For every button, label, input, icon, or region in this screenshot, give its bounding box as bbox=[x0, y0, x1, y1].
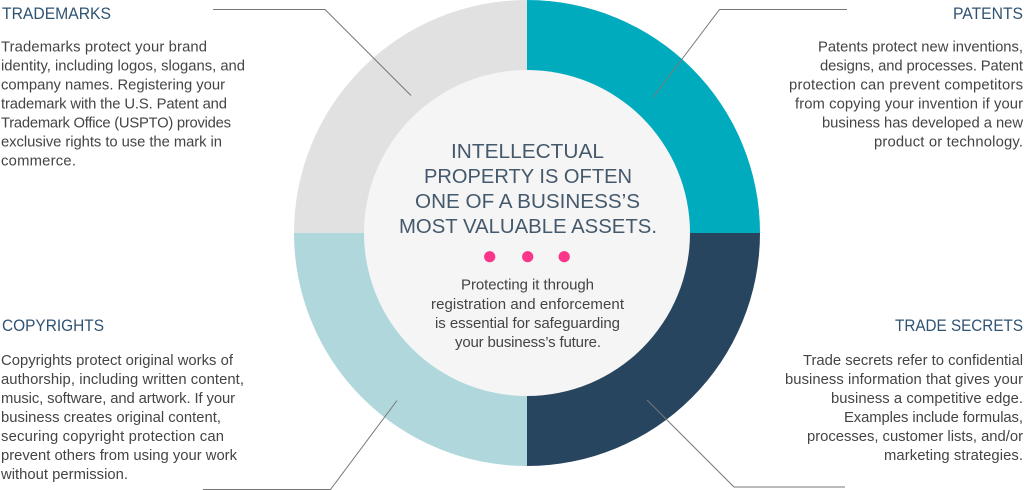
text: patents: business has developed a new bbox=[822, 116, 1023, 132]
center text: is essential for safeguarding bbox=[435, 315, 620, 332]
text: trademarks: trademark with the U.S. Patent and bbox=[1, 96, 227, 112]
text: trademarks bbox=[1, 40, 245, 170]
text: copyrights: prevent others from using your work bbox=[1, 448, 238, 464]
pink dots bbox=[484, 251, 570, 262]
text: trademarks: Trademarks protect your brand bbox=[1, 40, 207, 56]
leader line: copyrights bbox=[203, 400, 397, 490]
donut chart bbox=[294, 0, 760, 466]
segment: patents bbox=[527, 0, 760, 233]
leader line: trademarks bbox=[213, 10, 411, 96]
center heading: ONE OF A BUSINESS’S bbox=[415, 190, 640, 213]
text: copyrights: without permission. bbox=[0, 467, 128, 483]
text: trademarks: exclusive rights to use the mark in bbox=[1, 134, 222, 150]
center circle bbox=[364, 70, 690, 396]
text: trade secrets: marketing strategies. bbox=[884, 448, 1023, 464]
text: trade secrets: business information that gives your bbox=[785, 372, 1023, 388]
center text: Protecting it through bbox=[461, 276, 594, 294]
center text bbox=[431, 276, 625, 351]
center text: registration and enforcement bbox=[431, 296, 625, 313]
leader line: patents bbox=[653, 10, 847, 98]
text: trade secrets: Examples include formulas, bbox=[844, 410, 1023, 426]
segment: trade secrets bbox=[527, 233, 760, 466]
center text: your business’s future. bbox=[455, 334, 601, 351]
text: trade secrets: Trade secrets refer to confidential bbox=[803, 353, 1023, 369]
text: patents: product or technology. bbox=[874, 134, 1023, 150]
text: copyrights: authorship, including written content, bbox=[1, 372, 244, 388]
text: patents: protection can prevent competitors bbox=[789, 78, 1023, 94]
text: trademarks: identity, including logos, slogans, and bbox=[1, 58, 245, 74]
text: patents bbox=[789, 40, 1023, 150]
heading: copyrights: COPYRIGHTS bbox=[2, 317, 104, 335]
text: patents: designs, and processes. Patent bbox=[820, 58, 1023, 74]
heading: trademarks: TRADEMARKS bbox=[2, 5, 111, 23]
center heading: PROPERTY IS OFTEN bbox=[424, 165, 632, 188]
heading: patents: PATENTS bbox=[953, 5, 1023, 23]
text: trade secrets bbox=[785, 353, 1023, 464]
text: copyrights: securing copyright protection can bbox=[1, 429, 224, 445]
text: copyrights bbox=[0, 353, 244, 483]
segment: copyrights bbox=[294, 233, 527, 466]
text: trademarks: company names. Registering your bbox=[1, 78, 225, 94]
text: copyrights: music, software, and artwork. If your bbox=[1, 391, 235, 407]
center heading: MOST VALUABLE ASSETS. bbox=[399, 215, 657, 238]
segment: trademarks bbox=[294, 0, 527, 233]
text: copyrights: business creates original content, bbox=[1, 410, 221, 426]
text: trademarks: Trademark Office (USPTO) provides bbox=[1, 116, 231, 132]
text: patents: from copying your invention if your bbox=[795, 96, 1023, 112]
leader line: trade secrets bbox=[647, 400, 845, 487]
text: trade secrets: processes, customer lists, and/or bbox=[807, 429, 1023, 445]
center heading bbox=[399, 140, 657, 238]
center heading: INTELLECTUAL bbox=[451, 140, 604, 163]
text: patents: Patents protect new inventions, bbox=[818, 40, 1023, 56]
text: trade secrets: business a competitive edge. bbox=[831, 391, 1023, 407]
text: trademarks: commerce. bbox=[1, 154, 76, 170]
text: copyrights: Copyrights protect original works of bbox=[1, 353, 234, 369]
